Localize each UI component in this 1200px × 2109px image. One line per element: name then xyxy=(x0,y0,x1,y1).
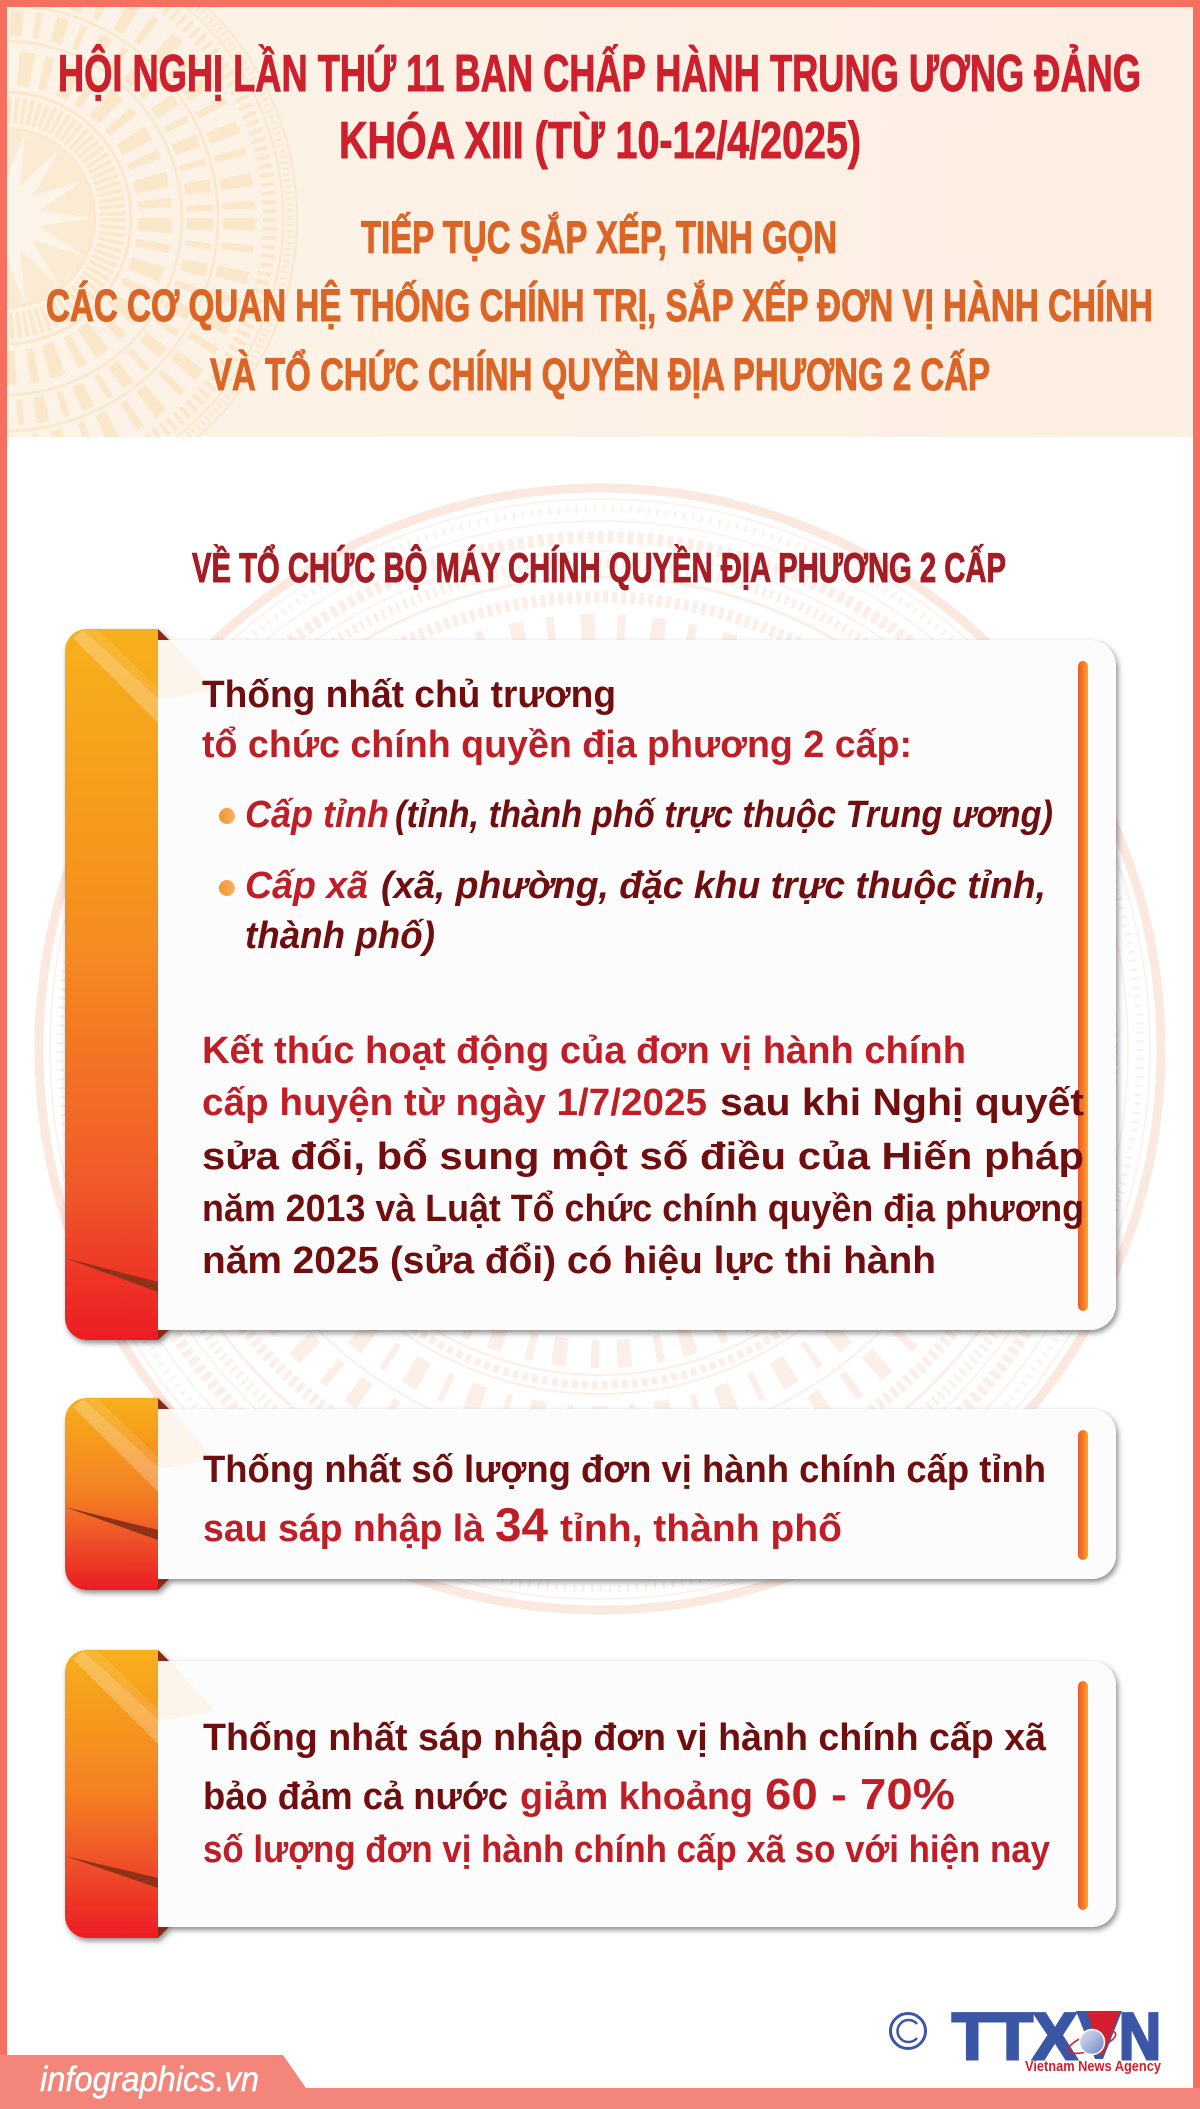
card 1 closing paragraph: sau khi Nghị quyết xyxy=(720,1082,1084,1124)
card 1 intro text xyxy=(202,674,912,766)
card 1 body with ribbon tab xyxy=(65,629,1116,1340)
card 2 text xyxy=(203,1449,1046,1551)
panel: card 3 communes xyxy=(65,1650,1116,1938)
card 1 closing paragraph: năm 2013 và Luật Tổ chức chính quyền địa phương xyxy=(202,1188,1084,1230)
card 1 bullet list xyxy=(219,794,1053,957)
subtitle: TIẾP TỤC SẮP XẾP, TINH GỌN xyxy=(361,212,837,263)
card 1 closing paragraph: năm 2025 (sửa đổi) có hiệu lực thi hành xyxy=(202,1240,936,1282)
card 3 text xyxy=(203,1717,1050,1871)
title xyxy=(58,44,1141,170)
card 3 right accent bar xyxy=(1078,1681,1088,1910)
icon: copyright symbol xyxy=(890,2014,926,2048)
card 1 intro text: tổ chức chính quyền địa phương 2 cấp: xyxy=(202,724,912,766)
card 2 right accent bar xyxy=(1078,1430,1088,1560)
card 2 text: Thống nhất số lượng đơn vị hành chính cấp tỉnh xyxy=(203,1449,1046,1491)
card 1 bullet list: (tỉnh, thành phố trực thuộc Trung ương) xyxy=(395,794,1053,836)
footer band xyxy=(0,2055,1200,2109)
card 1 closing paragraph: sửa đổi, bổ sung một số điều của Hiến pháp xyxy=(202,1136,1084,1178)
logo: TTXVN Vietnam News Agency: N xyxy=(1119,1999,1161,2073)
panel: card 1 local government xyxy=(65,629,1116,1340)
card 3 text: bảo đảm cả nước xyxy=(203,1776,508,1818)
card 2 text: tỉnh, thành phố xyxy=(560,1508,842,1550)
card 1 bullet list: thành phố) xyxy=(245,915,435,957)
card 1 bullet list: Cấp xã xyxy=(245,865,368,907)
card 1 closing paragraph xyxy=(202,1030,1084,1282)
card 2 text: 34 xyxy=(495,1498,548,1551)
header panel xyxy=(7,7,1193,437)
card 2 ribbon highlights xyxy=(65,1399,215,1540)
card 1 bullet list: (xã, phường, đặc khu trực thuộc tỉnh, xyxy=(381,865,1046,907)
logo: TTXVN Vietnam News Agency: Vietnam News Agency xyxy=(1025,2058,1162,2075)
background watermark: bronze drum xyxy=(39,488,1161,1610)
logo: TTXVN Vietnam News Agency: TTX xyxy=(952,1999,1077,2073)
card 1 right accent bar xyxy=(1078,661,1088,1311)
card 3 text: 60 - 70% xyxy=(765,1770,955,1819)
card 1 closing paragraph: Kết thúc hoạt động của đơn vị hành chính xyxy=(202,1030,966,1072)
footer website label: infographics.vn xyxy=(40,2060,259,2099)
card 3 text: số lượng đơn vị hành chính cấp xã so với hiện nay xyxy=(203,1829,1050,1871)
card 3 text: giảm khoảng xyxy=(520,1776,753,1818)
card 1 bullet list: Cấp tỉnh xyxy=(245,794,389,836)
card 1 closing paragraph: cấp huyện từ ngày 1/7/2025 xyxy=(202,1082,707,1124)
title: KHÓA XIII (TỪ 10-12/4/2025) xyxy=(339,112,861,170)
card 3 body with ribbon tab xyxy=(65,1650,1116,1938)
card 3 ribbon highlights xyxy=(65,1651,215,1888)
card 3 text: Thống nhất sáp nhập đơn vị hành chính cấp xã xyxy=(203,1717,1047,1759)
card 1 ribbon highlights xyxy=(65,630,215,1292)
card 2 body with ribbon tab xyxy=(65,1398,1116,1590)
header drum decoration xyxy=(7,7,298,437)
card 2 text: sau sáp nhập là xyxy=(203,1508,485,1550)
card 1 intro text: Thống nhất chủ trương xyxy=(202,674,616,716)
panel: card 2 provinces xyxy=(65,1398,1116,1590)
subtitle xyxy=(46,212,1153,400)
logo: TTXVN Vietnam News Agency xyxy=(952,1999,1162,2075)
